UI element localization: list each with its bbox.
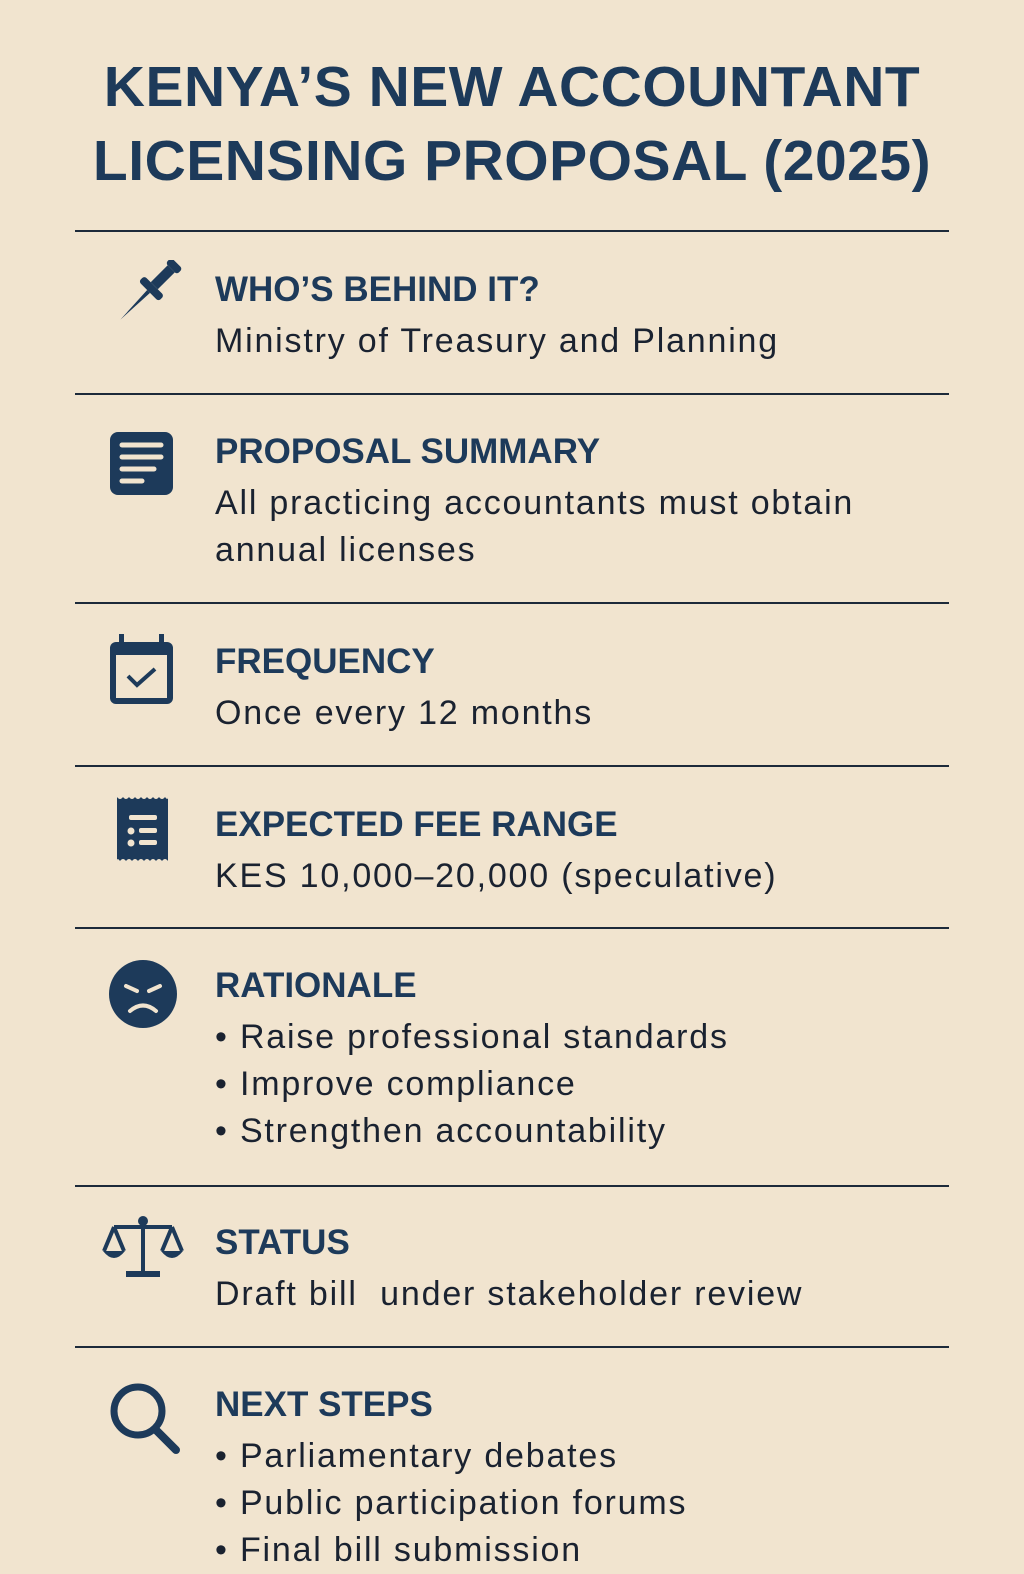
heading: STATUS [215,1223,350,1262]
body: Ministry of Treasury and Planning [215,322,779,360]
body: All practicing accountants must obtain [215,484,854,522]
heading: RATIONALE [215,966,417,1005]
body: bullets [215,1437,687,1569]
body: bullets [215,1018,729,1150]
icon: document [110,432,173,495]
panel: frequency [110,634,593,732]
title: KENYA’S NEW ACCOUNTANT [104,55,920,119]
panel: next steps [110,1384,687,1569]
icon: scales [102,1216,184,1277]
body: bullets: • Raise professional standards [215,1018,729,1056]
icon: calendar [110,634,173,704]
heading: FREQUENCY [215,642,435,681]
icon: frowning face [109,960,177,1028]
body: Once every 12 months [215,694,593,732]
heading: WHO’S BEHIND IT? [215,270,540,309]
heading: PROPOSAL SUMMARY [215,432,600,471]
title: LICENSING PROPOSAL (2025) [93,129,931,193]
panel: who's behind it [120,260,779,360]
panel: status [102,1216,803,1313]
icon: magnifier [110,1384,180,1454]
panel: proposal summary [110,432,854,569]
body: KES 10,000–20,000 (speculative) [215,857,777,895]
body: Draft bill under stakeholder review [215,1275,803,1313]
panel: rationale [109,960,729,1150]
heading: EXPECTED FEE RANGE [215,805,618,844]
title [93,55,931,193]
body: bullets: • Improve compliance [215,1065,577,1103]
icon: receipt [117,797,168,861]
body: bullets: • Parliamentary debates [215,1437,618,1475]
body: bullets: • Strengthen accountability [215,1112,667,1150]
icon: pushpin [120,260,182,320]
body: bullets: • Public participation forums [215,1484,687,1522]
body [215,484,854,569]
body: bullets: • Final bill submission [215,1531,582,1569]
panel: expected fee range [117,797,777,895]
heading: NEXT STEPS [215,1385,433,1424]
body: annual licenses [215,531,476,569]
